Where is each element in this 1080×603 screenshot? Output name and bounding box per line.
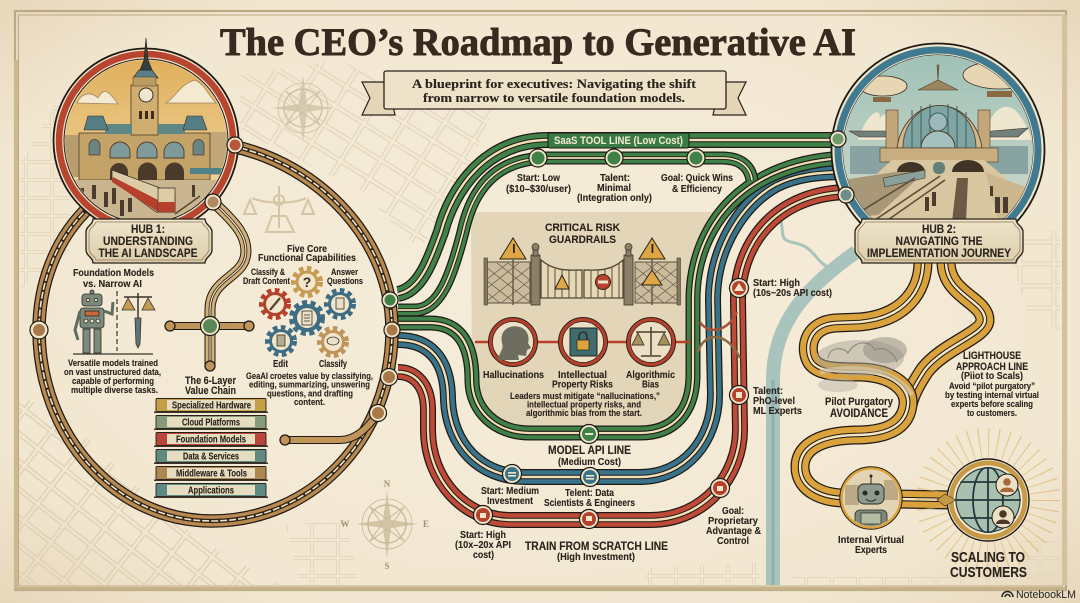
internal virtual experts label: Internal Virtual [838,534,904,546]
capabilities heading: Answer [331,267,358,278]
icon: head with brain [498,326,531,360]
model API line heading [548,443,631,468]
gears: five core capabilities [262,268,354,356]
risk labels: Property Risks [552,378,613,390]
gears: five core capabilities: ? [303,274,311,290]
gear labels: Classify [319,359,347,370]
lighthouse approach heading: LIGHTHOUSE [963,350,1021,362]
branch track and cross junction [165,202,378,445]
foundation models description: multiple diverse tasks. [71,385,158,396]
scaling to customers label: CUSTOMERS [950,564,1027,581]
internal virtual experts label [838,534,904,556]
foundation models heading: vs. Narrow AI [83,278,142,290]
right side red line labels [753,277,832,417]
stations on the tracks [30,131,854,528]
hub 2 medallion [830,42,1046,224]
capabilities heading: Questions [327,276,363,287]
foundation models heading [73,267,154,290]
value chain stack: Middleware & Tools [176,468,247,480]
hub 2 label plate: HUB 2: [922,224,956,236]
NotebookLM watermark: NotebookLM [1016,589,1076,601]
SaaS line station labels [506,172,733,204]
icon: globe with customers and sunburst [931,443,1045,557]
guardrails heading: CRITICAL RISK [545,222,620,234]
train from scratch goal label: Advantage & [706,525,761,537]
foundation models description: on vast unstructured data, [64,367,161,378]
model API line heading: (Medium Cost) [558,456,621,468]
compass rose: lower: N [384,479,391,489]
subtitle ribbon: A blueprint for executives: Navigating the shift [412,76,697,91]
capabilities description: GeaAI croetes value by classifying, [246,371,373,382]
hub 1 medallion [54,38,238,234]
model API station labels [481,485,635,509]
guardrails heading: GUARDRAILS [549,234,616,246]
train from scratch start label: Start: High [460,529,506,541]
hub 1 label plate: THE AI LANDSCAPE [98,248,198,260]
gear labels: Edit [273,359,289,370]
hub 2 label plate: NAVIGATING THE [896,236,983,248]
guardrails summary [510,391,660,419]
gear labels [273,359,347,370]
subtitle ribbon: from narrow to versatile foundation models. [423,90,685,105]
icon: internal virtual experts robot [840,467,902,530]
icon: robot [75,290,113,353]
lighthouse approach description: experts before scaling [951,399,1033,410]
lighthouse approach heading: APPROACH LINE [956,361,1028,373]
capabilities heading [243,243,363,287]
capabilities heading: Draft Content [243,276,291,287]
hub 1 label plate: UNDERSTANDING [103,236,193,248]
value chain stack: Data & Services [183,452,239,462]
capabilities heading: Functional Capabilities [258,252,356,264]
title: The CEO’s Roadmap to Generative AI [220,20,856,64]
lighthouse approach description [945,381,1039,419]
train from scratch start label: cost) [473,549,494,561]
capabilities heading: Five Core [287,243,327,255]
hub 1 label plate [86,219,212,263]
guardrails heading [545,222,620,246]
line: third green track [398,158,850,433]
foundation models heading: Foundation Models [73,267,154,279]
train from scratch start label [455,529,511,561]
foundation models description [64,358,161,396]
line: model API (blue) [398,172,850,477]
value chain stack: Applications [188,486,234,496]
capabilities description: editing, summarizing, unswering [249,380,370,390]
value chain heading: The 6-Layer [185,375,237,387]
risk circles row [475,318,690,366]
train from scratch goal label: Goal: [722,505,744,517]
SaaS line station labels: & Efficiency [672,183,722,195]
right side red line labels: ML Experts [753,405,802,417]
foundation models description: capable of performing [72,376,154,387]
right side red line labels: Start: High [753,277,800,289]
value chain stack: Cloud Platforms [182,418,240,428]
lighthouse approach heading: (Piiot to Scals) [961,370,1023,382]
value chain stack [154,398,268,498]
right side red line labels: Talent: [753,385,783,397]
hub 2 label plate: IMPLEMENTATION JOURNEY [867,248,1011,260]
SaaS line station labels: (Integration only) [577,192,652,204]
compass rose: upper [272,75,334,142]
foundation models description: Versatile models trained [68,358,158,369]
train from scratch heading: TRAIN FROM SCRATCH LINE [525,539,668,553]
lighthouse approach heading [956,350,1028,382]
SaaS line station labels: Start: Low [517,172,561,184]
lighthouse approach description: to customers. [967,408,1017,419]
internal virtual experts label: Experts [855,544,887,556]
pilot purgatory label [825,396,894,420]
risk labels: Hallucinations [483,369,544,381]
SaaS line station labels: Goal: Quick Wins [661,172,733,184]
lighthouse approach description: by testing internal virtual [945,390,1039,401]
train from scratch goal label: Control [717,535,749,547]
pilot purgatory label: AVOIDANCE [830,406,888,420]
compass rose: lower: S [384,561,390,571]
lighthouse approach description: Avoid “pilot purgatory” [949,381,1035,392]
train from scratch goal label [706,505,761,547]
icon: scale and wrench (narrow AI) [73,291,155,354]
train from scratch heading [525,539,668,563]
SaaS line station labels: Minimal [597,182,631,194]
icon: scales of justice [632,327,670,356]
guardrails summary: Leaders must mitigate “nallucinations,” [510,391,660,402]
guardrails summary: intellectual property risks, and [527,400,641,410]
track crossing junction [698,312,740,358]
scaling to customers label [950,549,1027,581]
value chain stack: Specialized Hardware [172,400,251,412]
hub 1 label plate: HUB 1: [131,224,165,236]
panel: critical risk guardrails background [471,212,713,433]
risk labels [483,369,675,390]
compass rose: lower: W [340,519,350,529]
capabilities heading: Classify & [251,267,285,278]
risk labels: Algorithmic [626,369,675,381]
train from scratch start label: (10x–20x API [455,539,511,551]
guardrails summary: algorithmic bias from the start. [526,408,642,419]
line: lighthouse approach (gold) [800,262,985,500]
river [773,217,856,585]
capabilities description: content. [294,397,325,408]
train from scratch goal label: Proprietary [708,515,758,527]
model API station labels: Investment [487,495,533,507]
SaaS line station labels: ($10–$30/user) [506,183,571,195]
capabilities description: questions, and drafting [267,388,353,400]
value chain heading: Value Chain [185,385,236,397]
line: SaaS tool (green) [398,140,850,310]
right side red line labels: PhO-level [753,395,795,407]
faded scales emblem [244,186,314,232]
guardrail gate illustration [484,238,680,305]
pilot purgatory label: Pilot Purgatory [825,396,894,408]
pilot purgatory cloud [816,337,912,395]
scaling to customers label: SCALING TO [951,549,1025,566]
SaaS line name plate: SaaS TOOL LINE (Low Cost) [554,135,683,147]
value chain heading [185,375,237,397]
model API station labels: Start: Medium [481,485,539,497]
model API station labels: Scientists & Engineers [544,497,635,509]
model API station labels: Telent: Data [565,487,614,499]
value chain stack: Foundation Models [176,434,246,446]
icon: locked book [570,328,597,356]
subtitle ribbon [362,71,746,115]
compass rose: lower: E [423,519,429,529]
large ring: AI landscape track [39,146,392,521]
model API line heading: MODEL API LINE [548,443,631,457]
right side red line labels: (10s~20s API cost) [753,287,832,299]
hub 2 label plate [855,219,1023,263]
risk labels: Intellectual [558,369,607,381]
compass rose: lower [340,479,429,571]
capabilities description [246,371,373,408]
SaaS line station labels: Talent: [600,172,630,184]
train from scratch heading: (High Investment) [557,551,635,563]
risk labels: Bias [642,378,659,390]
line: train from scratch (red) [398,192,850,520]
